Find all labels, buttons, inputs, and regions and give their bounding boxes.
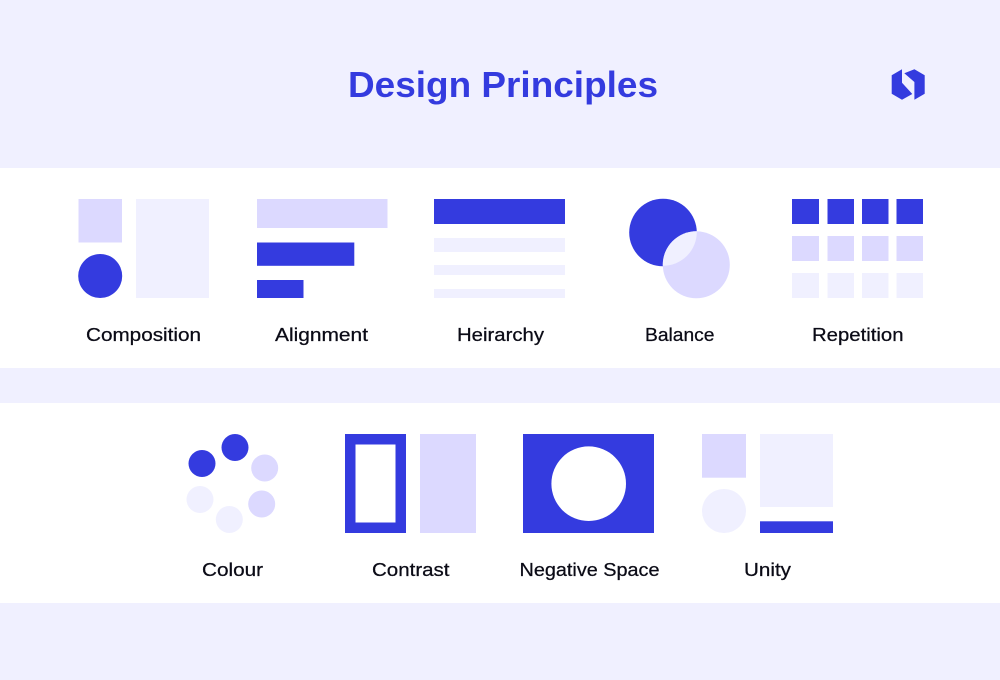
- contrast illustration: [345, 434, 476, 533]
- label: Alignment: Alignment: [275, 324, 368, 345]
- composition illustration: [78, 199, 209, 298]
- negative space illustration: [523, 434, 654, 533]
- hierarchy illustration: [434, 199, 565, 298]
- label: Negative Space: Negative Space: [520, 559, 660, 580]
- icon: hexagon logo: [892, 69, 925, 100]
- panel: second row: [0, 403, 1000, 603]
- label: Contrast: Contrast: [372, 559, 450, 580]
- colour illustration: [186, 434, 278, 533]
- panel: first row: [0, 168, 1000, 368]
- label: Unity: Unity: [744, 559, 792, 580]
- label: Heirarchy: Heirarchy: [457, 324, 545, 345]
- balance illustration: [629, 199, 730, 298]
- label: Colour: Colour: [202, 559, 263, 580]
- unity illustration: [702, 434, 833, 533]
- repetition illustration: [792, 199, 923, 298]
- alignment illustration: [257, 199, 388, 298]
- label: Balance: Balance: [645, 324, 714, 345]
- title: Design Principles: [348, 64, 658, 105]
- label: Composition: Composition: [86, 324, 201, 345]
- label: Repetition: Repetition: [812, 324, 904, 345]
